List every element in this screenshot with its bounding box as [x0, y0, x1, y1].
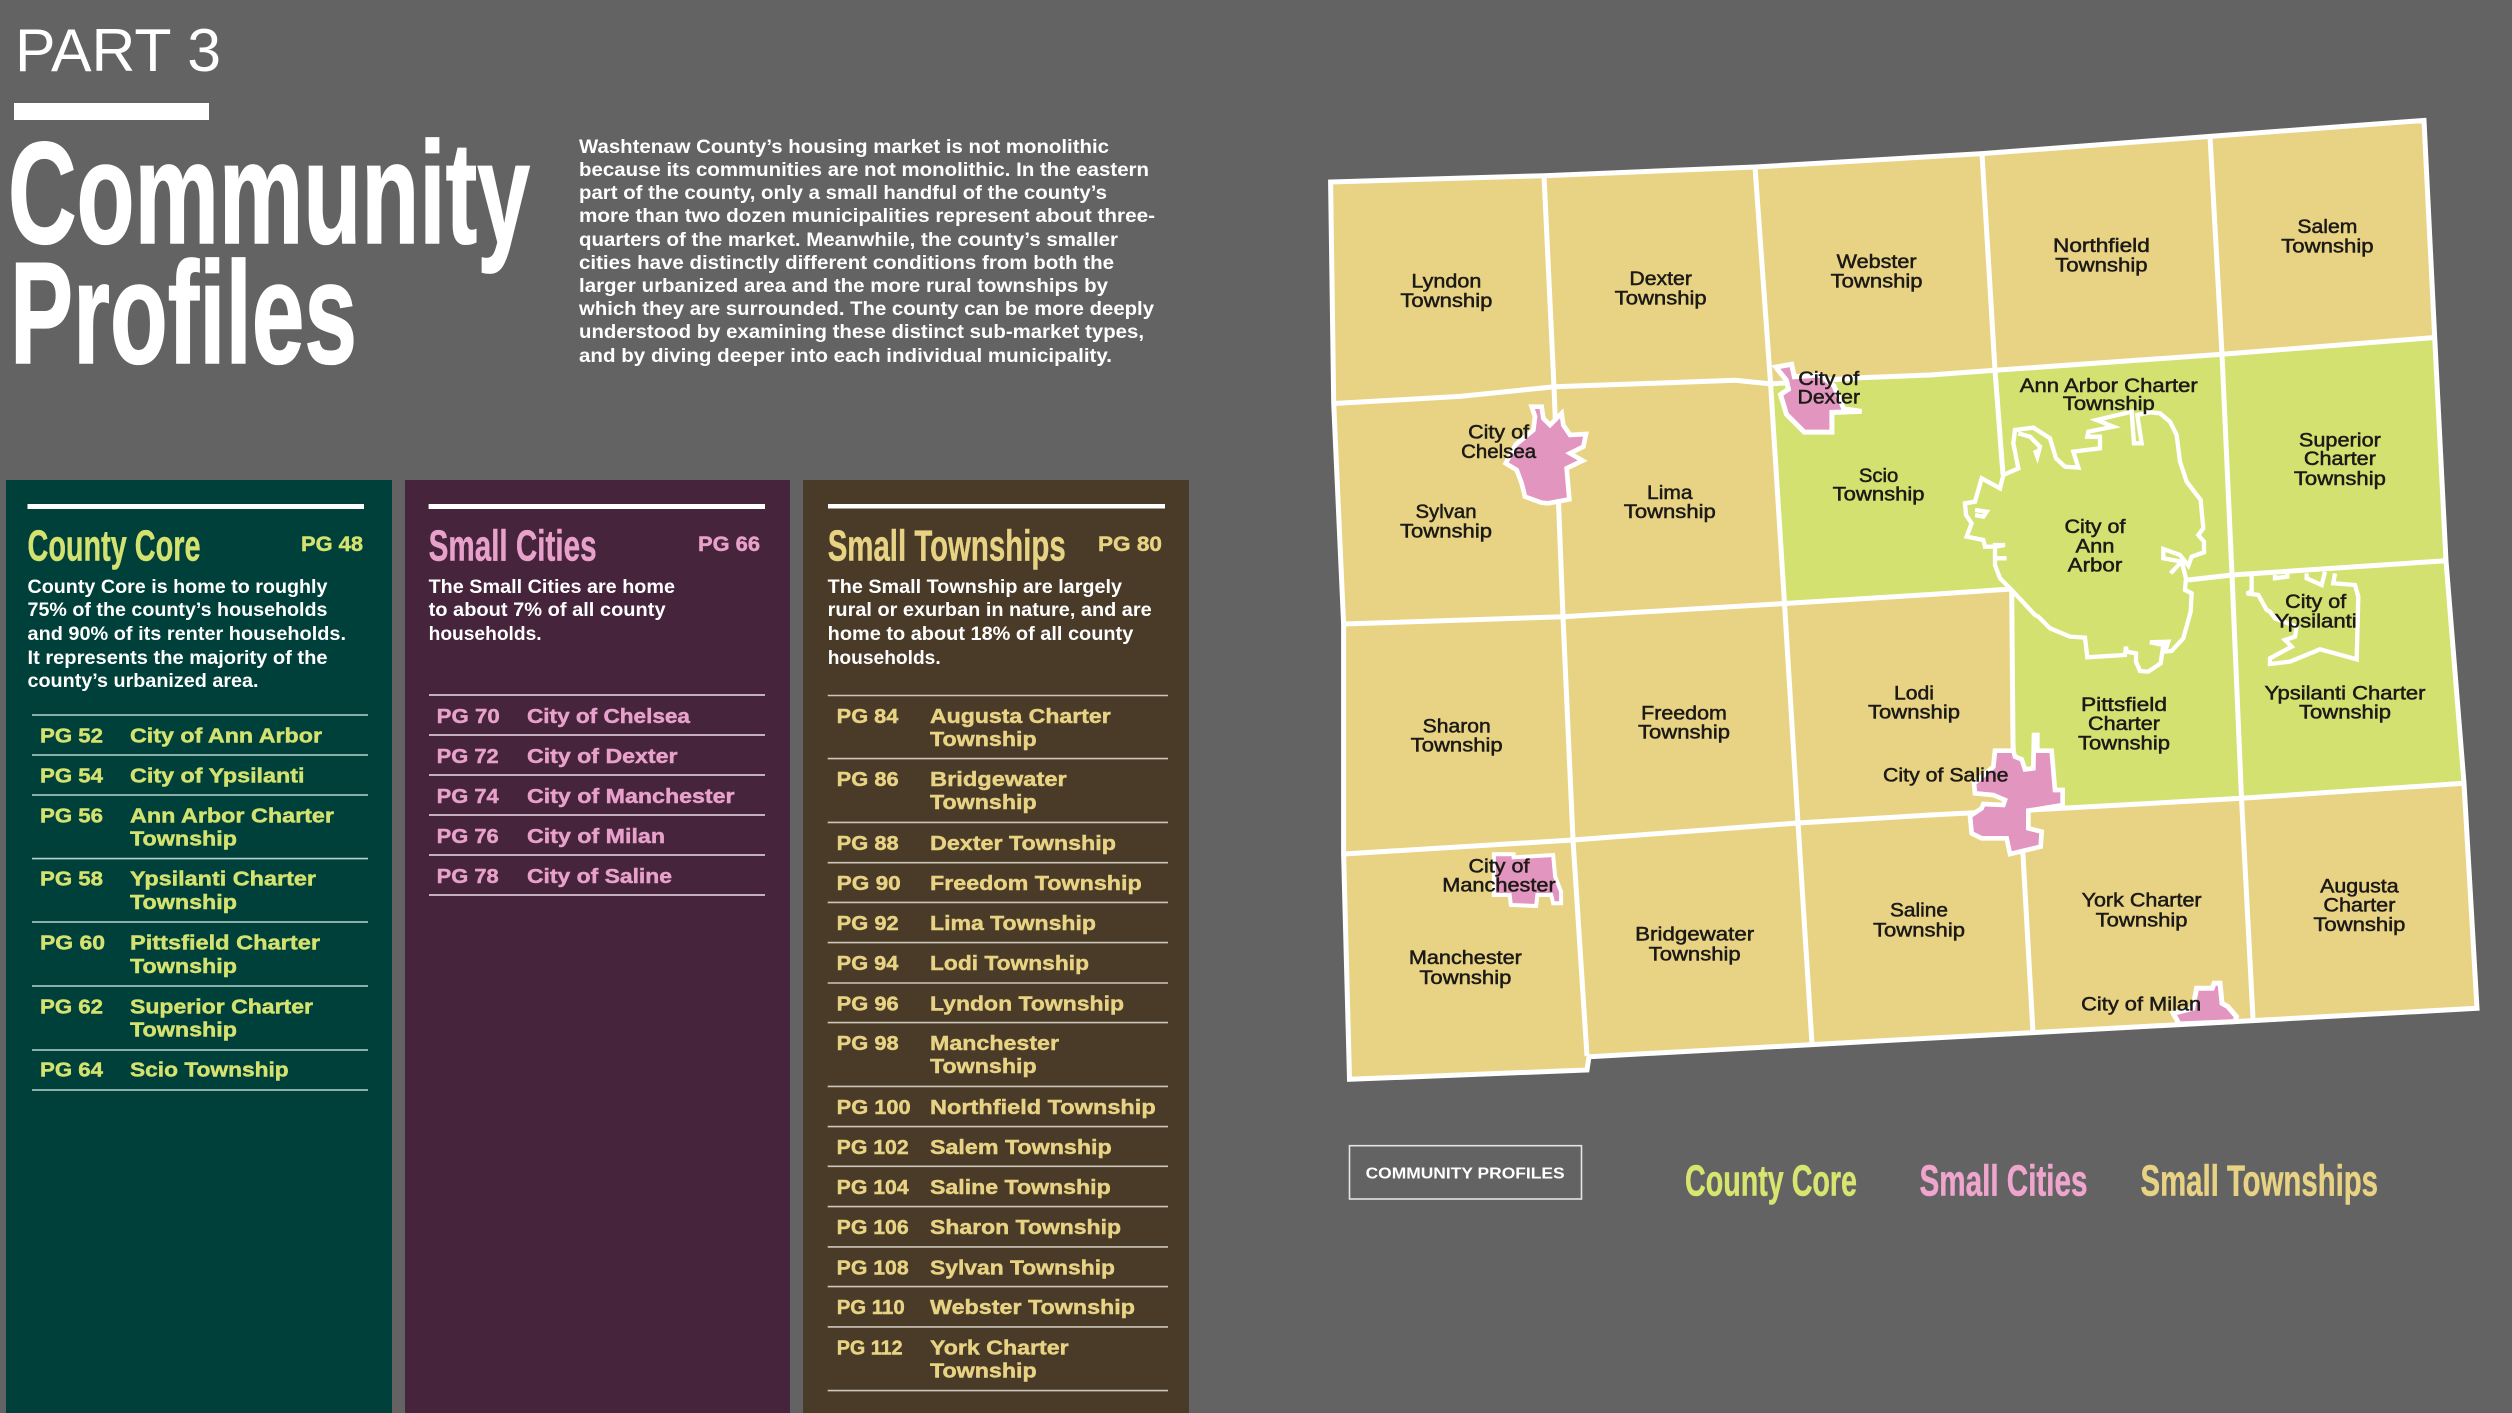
intro paragraph [578, 136, 1155, 367]
map label: Augusta Charter Township: Charter [2323, 896, 2396, 917]
map label: Bridgewater Township [1635, 925, 1755, 966]
row: PG 102 [837, 1136, 1112, 1159]
title: Community Profiles: Profiles [10, 232, 357, 394]
page reference: PG 48: PG 48 [301, 533, 363, 556]
row: PG 90: Freedom Township [930, 872, 1142, 895]
row: PG 52: City of Ann Arbor [130, 725, 322, 748]
intro paragraph: Washtenaw County’s housing market is not monolithic [579, 136, 1109, 158]
row: PG 60: Township [130, 955, 237, 978]
map label: City of Chelsea [1461, 422, 1537, 463]
row: PG 106: PG 106 [837, 1216, 909, 1239]
row: PG 86: Bridgewater [930, 768, 1067, 791]
row: PG 108 [837, 1256, 1115, 1279]
row: PG 74 [437, 785, 735, 808]
row: PG 74: City of Manchester [527, 785, 735, 808]
row: PG 96 [837, 992, 1124, 1016]
row: PG 60: Pittsfield Charter [130, 932, 320, 955]
description: Small Cities: households. [429, 623, 542, 645]
map township boundaries [1331, 120, 2477, 1079]
row: PG 90: PG 90 [837, 872, 901, 895]
row: PG 54: PG 54 [40, 765, 104, 788]
map label: Sharon Township: Sharon [1423, 717, 1491, 738]
map label: City of Ann Arbor: City of [2064, 517, 2126, 538]
intro paragraph: and by diving deeper into each individual municipality. [579, 345, 1112, 367]
row: PG 88: PG 88 [837, 832, 899, 855]
description: Small Townships: households. [828, 647, 941, 669]
row: PG 90 [837, 872, 1142, 895]
row: PG 78: City of Saline [527, 865, 672, 888]
county map [1331, 120, 2477, 1079]
row: PG 88 [837, 832, 1116, 855]
row: PG 102: Salem Township [930, 1136, 1112, 1159]
row: PG 108: PG 108 [837, 1256, 909, 1279]
legend box: COMMUNITY PROFILES [1350, 1146, 1582, 1199]
row: PG 60: PG 60 [40, 932, 105, 955]
map label: Webster Township: Webster [1837, 252, 1917, 273]
row: PG 96: Lyndon Township [930, 992, 1124, 1016]
row: PG 84: Augusta Charter [930, 705, 1111, 728]
row: PG 98: PG 98 [837, 1032, 899, 1055]
map label: City of Ypsilanti: City of [2285, 592, 2347, 613]
row: PG 98: Manchester [930, 1032, 1059, 1055]
row: PG 58: PG 58 [40, 868, 103, 890]
map label: Lyndon Township [1400, 272, 1492, 312]
row: PG 110: PG 110 [837, 1296, 905, 1319]
map label: Ypsilanti Charter Township [2264, 683, 2426, 724]
description: Small Townships: home to about 18% of all county [828, 623, 1133, 645]
intro paragraph: quarters of the market. Meanwhile, the county’s smaller [579, 229, 1118, 251]
map label: Lima Township: Township [1624, 502, 1716, 523]
row: PG 100: PG 100 [837, 1096, 911, 1119]
row: PG 76 [437, 825, 665, 848]
row: PG 70: PG 70 [437, 705, 500, 728]
map label: Lodi Township: Township [1868, 703, 1960, 724]
intro paragraph: because its communities are not monolithic. In the eastern [579, 159, 1149, 181]
heading: County Core: County Core [28, 522, 200, 571]
row: PG 62 [40, 996, 313, 1042]
legend: County Core: County Core [1685, 1156, 1857, 1206]
map label: Webster Township: Township [1831, 272, 1923, 292]
row: PG 62: PG 62 [40, 996, 103, 1019]
map label: Ypsilanti Charter Township: Township [2299, 703, 2391, 724]
description: Small Townships: rural or exurban in nature, and are [828, 599, 1152, 621]
map label: Manchester Township: Manchester [1409, 948, 1523, 969]
map label: Sharon Township [1411, 717, 1503, 757]
row: PG 54: City of Ypsilanti [130, 765, 304, 788]
map label: Dexter Township [1615, 269, 1707, 309]
title: Community Profiles: Community [8, 112, 530, 274]
map label: Superior Charter Township: Charter [2304, 449, 2377, 470]
map label: Dexter Township: Dexter [1629, 269, 1693, 290]
page reference: PG 66: PG 66 [698, 533, 760, 556]
row: PG 92: Lima Township [930, 912, 1096, 935]
description: Small Townships: The Small Township are largely [828, 576, 1122, 598]
row: PG 78: PG 78 [437, 865, 499, 888]
map label: York Charter Township [2082, 891, 2202, 932]
map label: Salem Township: Salem [2297, 217, 2357, 238]
row: PG 100 [837, 1096, 1156, 1119]
panel: Small Townships [803, 480, 1189, 1413]
map label: Sharon Township: Township [1411, 736, 1503, 757]
row: PG 98 [837, 1032, 1059, 1078]
row: PG 76: City of Milan [527, 825, 665, 848]
row: PG 56: PG 56 [40, 805, 103, 828]
map label: Scio Township: Scio [1859, 466, 1898, 487]
title: Community Profiles [8, 112, 530, 394]
map label: Sylvan Township: Township [1400, 521, 1492, 542]
row: PG 86: PG 86 [837, 768, 899, 791]
row: PG 112: Township [930, 1359, 1037, 1382]
description: Small Cities: to about 7% of all county [429, 599, 666, 621]
map label: Sylvan Township [1400, 502, 1492, 542]
map label: Pittsfield Charter Township [2078, 695, 2170, 754]
map label: Saline Township: Township [1873, 921, 1965, 942]
map label: City of Chelsea: Chelsea [1461, 442, 1537, 463]
row: PG 56: Ann Arbor Charter [130, 805, 334, 828]
row: PG 84: Township [930, 728, 1037, 751]
map label: Augusta Charter Township: Township [2313, 915, 2405, 936]
row: PG 88: Dexter Township [930, 832, 1116, 855]
map label: Lima Township: Lima [1647, 483, 1693, 504]
description: Small Cities: The Small Cities are home [429, 576, 675, 598]
map label: Dexter Township: Township [1615, 288, 1707, 309]
row: PG 58 [40, 868, 316, 914]
row: PG 64 [40, 1058, 289, 1082]
row: PG 72 [437, 745, 678, 768]
row: PG 84 [837, 705, 1111, 751]
map label: Scio Township: Township [1833, 485, 1925, 506]
map label: City of Ann Arbor: Ann [2076, 536, 2114, 557]
row: PG 58: Township [130, 891, 237, 914]
map label: City of Ypsilanti: Ypsilanti [2275, 611, 2357, 632]
map label: Superior Charter Township: Township [2294, 469, 2386, 490]
map label: Freedom Township [1638, 703, 1730, 744]
map label: York Charter Township: Township [2096, 911, 2188, 932]
description: County Core: and 90% of its renter households. [28, 623, 346, 645]
row: PG 94: Lodi Township [930, 952, 1089, 975]
row: PG 78 [437, 865, 672, 888]
row: PG 52: PG 52 [40, 725, 103, 748]
map label: Saline Township: Saline [1890, 901, 1948, 922]
legend: Small Townships: Small Townships [2140, 1156, 2378, 1206]
map label: Salem Township: Township [2281, 236, 2374, 258]
map area: City of Milan [2173, 983, 2236, 1024]
map label: Ann Arbor Charter Township [2020, 376, 2199, 415]
row: PG 100: Northfield Township [930, 1096, 1156, 1119]
map label: Webster Township [1831, 252, 1923, 292]
map area: City of Chelsea [1506, 407, 1586, 503]
intro paragraph: understood by examining these distinct sub-market types, [579, 321, 1144, 343]
map boundary: City of Ypsilanti [2247, 572, 2358, 664]
description: Small Townships [828, 576, 1152, 669]
map label: Northfield Township [2053, 236, 2150, 276]
description: County Core: 75% of the county’s households [28, 599, 328, 621]
map label: Lodi Township [1868, 683, 1960, 724]
map label: Lodi Township: Lodi [1894, 683, 1934, 704]
description: County Core: county’s urbanized area. [28, 670, 258, 692]
row: PG 58: Ypsilanti Charter [130, 868, 316, 890]
accent bar [14, 103, 209, 120]
map label: Scio Township [1833, 466, 1925, 506]
list: County Core communities [32, 715, 368, 1090]
map label: Manchester Township [1409, 948, 1523, 989]
map label: Salem Township [2281, 217, 2374, 258]
description: County Core: It represents the majority of the [28, 647, 328, 669]
row: PG 70 [437, 705, 691, 728]
row: PG 106 [837, 1216, 1121, 1239]
map area: small township base [1331, 120, 2477, 1079]
map label: Pittsfield Charter Township: Pittsfield [2081, 695, 2167, 716]
map label: Superior Charter Township: Superior [2299, 430, 2382, 451]
map label: City of Ann Arbor: Arbor [2068, 555, 2123, 576]
list: Small Cities communities [429, 695, 765, 895]
map label: City of Manchester: Manchester [1442, 876, 1557, 897]
map label: Northfield Township: Northfield [2053, 236, 2150, 257]
row: PG 86 [837, 768, 1067, 814]
section label: PART 3: PART 3 [15, 17, 221, 84]
row: PG 104: PG 104 [837, 1176, 909, 1199]
row: PG 112: York Charter [930, 1336, 1069, 1359]
panel: Small Cities [405, 480, 790, 1413]
map label: Pittsfield Charter Township: Township [2078, 733, 2170, 754]
map label: Manchester Township: Township [1419, 968, 1511, 989]
row: PG 62: Township [130, 1018, 237, 1042]
row: PG 108: Sylvan Township [930, 1256, 1115, 1279]
row: PG 72: PG 72 [437, 745, 499, 768]
row: PG 92 [837, 912, 1096, 935]
intro paragraph: cities have distinctly different conditions from both the [579, 252, 1114, 274]
row: PG 64: Scio Township [130, 1058, 289, 1082]
row: PG 70: City of Chelsea [527, 705, 691, 728]
row: PG 52 [40, 725, 322, 748]
map label: Lyndon Township: Township [1400, 291, 1492, 312]
map label: City of Dexter: City of [1798, 369, 1860, 390]
map label: Ann Arbor Charter Township: Ann Arbor Charter [2020, 376, 2199, 397]
intro paragraph: which they are surrounded. The county can be more deeply [578, 298, 1154, 320]
panel: County Core [6, 480, 392, 1413]
row: PG 64: PG 64 [40, 1058, 104, 1082]
row: PG 62: Superior Charter [130, 996, 313, 1019]
row: PG 86: Township [930, 791, 1037, 814]
description: County Core: County Core is home to roughly [28, 576, 328, 598]
map label: Augusta Charter Township [2313, 877, 2405, 936]
row: PG 74: PG 74 [437, 785, 499, 808]
row: PG 54 [40, 765, 304, 788]
legend box: COMMUNITY PROFILES: COMMUNITY PROFILES [1366, 1165, 1565, 1182]
page reference: PG 80: PG 80 [1098, 533, 1162, 556]
map label: Freedom Township: Township [1638, 723, 1730, 744]
row: PG 110 [837, 1296, 1135, 1319]
row: PG 94: PG 94 [837, 952, 899, 975]
map label: City of Ypsilanti [2275, 592, 2357, 632]
row: PG 112: PG 112 [837, 1336, 903, 1359]
map label: City of Dexter [1798, 369, 1861, 408]
row: PG 84: PG 84 [837, 705, 899, 728]
map label: Superior Charter Township [2294, 430, 2386, 490]
row: PG 98: Township [930, 1055, 1037, 1078]
map label: Bridgewater Township: Bridgewater [1635, 925, 1755, 946]
row: PG 104 [837, 1176, 1111, 1199]
description: County Core [28, 576, 346, 692]
map label: City of Dexter: Dexter [1798, 388, 1861, 408]
map label: Pittsfield Charter Township: Charter [2088, 714, 2161, 735]
map label: City of Chelsea: City of [1468, 422, 1530, 444]
map label: City of Milan: City of Milan [2081, 995, 2201, 1016]
map area: City of Manchester [1494, 854, 1561, 906]
map area: county core townships [1771, 338, 2464, 811]
row: PG 110: Webster Township [930, 1296, 1135, 1319]
map label: Northfield Township: Township [2055, 255, 2148, 276]
map label: Augusta Charter Township: Augusta [2320, 877, 2399, 898]
map label: Bridgewater Township: Township [1649, 945, 1741, 966]
intro paragraph: larger urbanized area and the more rural townships by [579, 275, 1108, 297]
intro paragraph: part of the county, only a small handful of the county’s [579, 182, 1107, 204]
heading: Small Townships: Small Townships [828, 522, 1066, 571]
map label: Lyndon Township: Lyndon [1411, 272, 1481, 292]
legend: Small Cities: Small Cities [1920, 1156, 2088, 1206]
map area: City of Dexter [1776, 364, 1862, 432]
map label: Lima Township [1624, 483, 1716, 523]
map label: York Charter Township: York Charter [2082, 891, 2202, 912]
map boundary: City of Ann Arbor [1965, 412, 2204, 672]
map label: Freedom Township: Freedom [1641, 703, 1727, 724]
map label: City of Manchester: City of [1468, 857, 1530, 878]
row: PG 60 [40, 932, 320, 978]
row: PG 106: Sharon Township [930, 1216, 1121, 1239]
map label: Ann Arbor Charter Township: Township [2063, 394, 2155, 415]
description: Small Cities [429, 576, 675, 645]
map label: City of Manchester [1442, 857, 1557, 897]
row: PG 96: PG 96 [837, 992, 899, 1016]
intro paragraph: more than two dozen municipalities represent about three- [579, 205, 1155, 227]
map label: Sylvan Township: Sylvan [1416, 502, 1476, 523]
row: PG 56: Township [130, 828, 237, 850]
row: PG 72: City of Dexter [527, 745, 678, 768]
row: PG 112 [837, 1336, 1069, 1382]
row: PG 56 [40, 805, 334, 850]
map label: Saline Township [1873, 901, 1965, 942]
list: Small Townships communities [828, 696, 1168, 1391]
row: PG 94 [837, 952, 1089, 975]
row: PG 104: Saline Township [930, 1176, 1111, 1199]
row: PG 92: PG 92 [837, 912, 899, 935]
map label: Ypsilanti Charter Township: Ypsilanti Charter [2264, 683, 2426, 704]
row: PG 76: PG 76 [437, 825, 499, 848]
row: PG 102: PG 102 [837, 1136, 909, 1159]
map label: City of Ann Arbor [2064, 517, 2126, 576]
map area: City of Saline [1970, 735, 2063, 854]
map label: City of Saline: City of Saline [1883, 766, 2009, 787]
heading: Small Cities: Small Cities [429, 522, 597, 571]
